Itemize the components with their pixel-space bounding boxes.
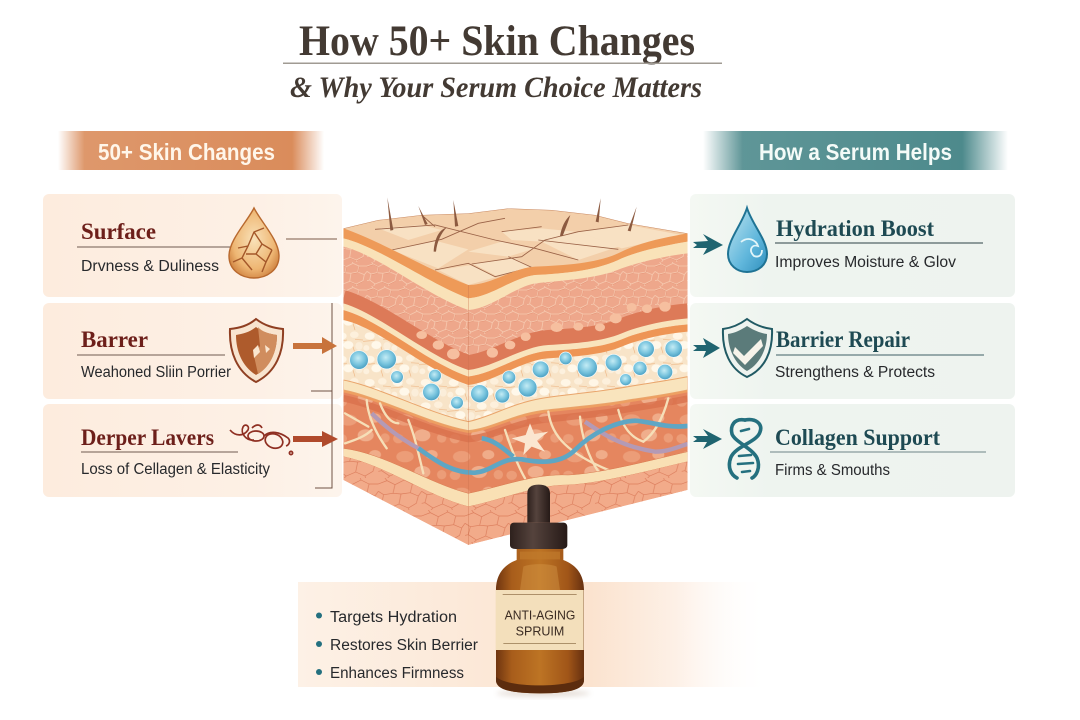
bottle label: SPRUIM — [516, 623, 564, 638]
heading: how a serum helps — [703, 131, 1008, 170]
icon: broken fibres — [230, 425, 293, 455]
dropper collar — [510, 523, 567, 549]
skin cross-section — [343, 197, 688, 545]
dermis — [343, 387, 688, 498]
hydration text: Improves Moisture & Glov — [775, 254, 956, 271]
deeper layers text: Loss of Cellagen & Elasticity — [81, 461, 270, 478]
barrier heading: Barrer — [81, 327, 148, 352]
benefit list — [316, 609, 478, 682]
pink layer base — [343, 298, 688, 363]
arrow: hydration — [693, 234, 723, 255]
top orange band — [343, 228, 688, 298]
top cream band — [343, 238, 688, 310]
icon: teal shield — [723, 319, 772, 377]
top surface — [344, 208, 688, 310]
heading: 50+ skin changes: 50+ Skin Changes — [98, 139, 275, 165]
icon: dna — [729, 420, 761, 478]
hydration heading: Hydration Boost — [776, 216, 934, 241]
arrow: barrier — [293, 337, 337, 354]
barrier text: Weahoned Sliin Porrier — [81, 364, 231, 381]
top rim — [343, 208, 688, 233]
icon: water drop — [728, 208, 767, 272]
bottle glass — [496, 548, 584, 693]
bottom cells — [343, 457, 688, 545]
arrow: barrier repair — [693, 338, 720, 358]
lower cream band — [343, 448, 688, 507]
title: How 50+ Skin Changes — [299, 18, 695, 65]
collagen burst — [512, 423, 548, 455]
arrow: deeper layers — [293, 431, 338, 447]
surface cracks — [375, 215, 628, 277]
bottle label: ANTI-AGING — [505, 607, 575, 622]
vessel: purple — [372, 413, 688, 452]
benefit list: Enhances Firmness — [330, 665, 464, 682]
panel: surface — [43, 194, 342, 297]
bottle label — [496, 590, 584, 650]
lower cream band mid — [343, 377, 688, 431]
icon: cracked shield — [230, 319, 283, 382]
connector: surface line — [286, 238, 337, 240]
panel: hydration boost — [690, 194, 1015, 297]
arrow: collagen — [693, 429, 722, 449]
barrier repair text: Strengthens & Protects — [775, 364, 935, 381]
heading: how a serum helps: How a Serum Helps — [759, 139, 952, 165]
barrier repair heading: Barrier Repair — [776, 327, 910, 352]
dropper bulb — [527, 485, 550, 523]
deeper layers heading: Derper Lavers — [81, 425, 214, 450]
bubbles — [350, 340, 682, 409]
benefit list: Targets Hydration — [330, 609, 457, 626]
connector: bracket — [311, 303, 332, 488]
panel: barrier repair — [690, 303, 1015, 399]
fat layer — [343, 317, 688, 425]
serum bottle — [496, 485, 590, 697]
upper cream band — [343, 303, 688, 377]
panel: deeper layers — [43, 404, 342, 497]
hairs — [387, 197, 637, 252]
collagen heading: Collagen Support — [775, 425, 940, 450]
subtitle: & Why Your Serum Choice Matters — [290, 71, 702, 104]
panel: benefits — [298, 582, 770, 687]
pink layer — [343, 247, 688, 380]
fibres — [345, 398, 668, 478]
skin plates — [378, 225, 682, 285]
round cells — [416, 302, 671, 359]
panel: barrier — [43, 303, 342, 399]
panel: collagen support — [690, 404, 1015, 497]
icon: cracked drop — [229, 208, 279, 278]
title — [283, 18, 722, 104]
dermis shading — [343, 398, 688, 439]
surface heading: Surface — [81, 219, 156, 244]
heading: 50+ skin changes — [58, 131, 324, 170]
orange rim — [343, 391, 688, 432]
vessel: blue — [418, 421, 688, 473]
corner seam — [467, 285, 469, 545]
collagen text: Firms & Smouths — [775, 462, 890, 479]
benefit list: Restores Skin Berrier — [330, 637, 478, 654]
orange band lower — [343, 310, 688, 385]
surface text: Drvness & Duliness — [81, 258, 219, 275]
